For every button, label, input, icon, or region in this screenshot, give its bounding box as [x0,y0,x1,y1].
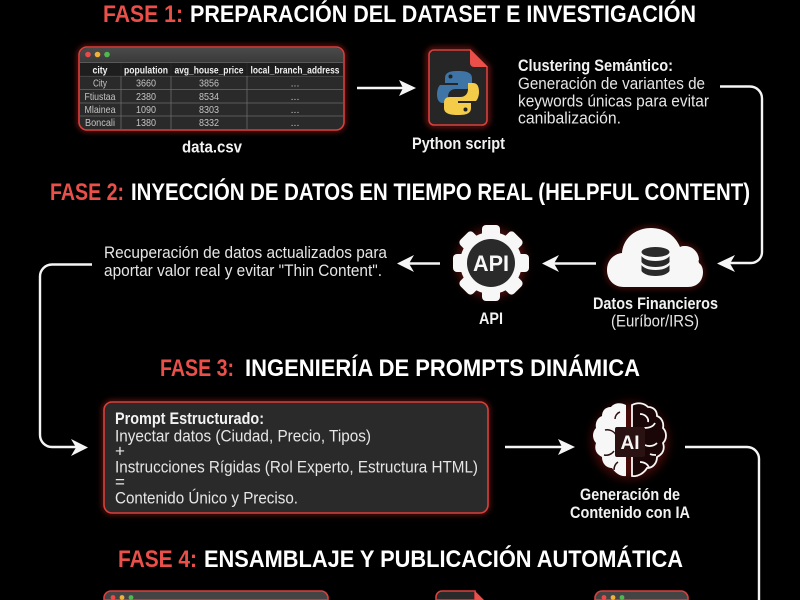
text block: clustering semántico: Generación de variantes de [518,74,705,93]
label: datos financieros [593,294,718,330]
title: fase 2: FASE 2: [50,179,124,206]
label: generación de contenido [570,485,690,522]
text block: clustering semántico [518,56,709,128]
panel: data.csv table window: ... [291,78,299,90]
text block: recuperación de datos: aportar valor real y evitar "Thin Content". [104,261,382,280]
arrow: prompt to ai [505,439,575,455]
panel: data.csv table window [79,47,344,130]
panel: data.csv table window: ... [291,104,299,116]
panel: data.csv table window: 8332 [199,117,219,129]
panel: bottom window left [104,591,328,600]
icon: python script file [428,49,488,126]
panel: data.csv table window: avg_house_price [174,64,244,76]
panel: data.csv table window: 1380 [136,117,156,129]
label: datos financieros: (Euríbor/IRS) [611,312,699,330]
panel: prompt estructurado: = [115,472,125,492]
icon: cloud with database [607,228,703,287]
panel: data.csv table window: 1090 [136,104,156,116]
arrow: datos to api [542,255,596,272]
panel: data.csv table window: Boncali [85,117,115,129]
label: data.csv: data.csv [182,138,242,156]
panel: prompt estructurado: Instrucciones Rígidas (Rol Experto, Estructura HTML) [115,458,478,476]
panel: prompt estructurado: Contenido Único y Preciso. [115,488,298,508]
panel: data.csv table window: 3660 [136,78,156,90]
arrow: api to text [397,255,440,272]
arrow: ai to fase 4 [685,447,759,600]
panel: data.csv table window: Ftiustaa [84,91,116,103]
label: datos financieros: Datos Financieros [593,294,718,313]
title: fase 1: PREPARACIÓN DEL DATASET E INVESTIGACIÓN [190,0,696,28]
title: fase 1: FASE 1: [103,1,183,28]
panel: prompt estructurado: + [115,442,125,460]
panel: data.csv table window: local_branch_address [250,64,340,76]
arrow: clustering to datos financieros [717,86,762,272]
panel: data.csv table window: 8303 [199,104,219,116]
label: api: API [479,309,503,328]
panel: prompt estructurado [104,402,488,513]
title: fase 4: ENSAMBLAJE Y PUBLICACIÓN AUTOMÁTICA [204,545,683,573]
panel: data.csv table window: population [124,64,168,76]
arrow: table to python [357,80,416,96]
label: generación de contenido: Generación de [580,485,680,504]
text block: clustering semántico: Clustering Semántico: [518,56,673,75]
panel: data.csv table window: ... [291,117,299,129]
text block: recuperación de datos: Recuperación de datos actualizados para [104,243,387,262]
label: generación de contenido: Contenido con IA [570,503,690,522]
panel: data.csv table window: 2380 [136,91,156,103]
panel: data.csv table window: city [92,64,108,76]
title: fase 3: FASE 3: [160,355,234,382]
icon: bottom file [436,591,484,600]
title: fase 3: INGENIERÍA DE PROMPTS DINÁMICA [245,354,640,382]
arrow: text to prompt box [40,264,92,456]
panel: data.csv table window: 3856 [199,78,219,90]
icon: ai brain: AI [620,433,640,454]
text block: clustering semántico: canibalización. [518,108,621,128]
icon: api gear [453,225,529,301]
icon: ai brain [592,403,668,479]
panel: data.csv table window: ... [291,91,299,103]
panel: data.csv table window: Mlainea [84,104,116,116]
text block: recuperación de datos [104,243,387,280]
panel: prompt estructurado: Prompt Estructurado: [115,409,264,428]
panel: data.csv table window: 8534 [199,91,219,103]
panel: bottom window right [595,591,688,600]
text block: clustering semántico: keywords únicas para evitar [518,92,709,110]
panel: data.csv table window: City [93,78,108,90]
title: fase 4: FASE 4: [118,546,197,573]
label: python script: Python script [412,134,505,153]
panel: prompt estructurado: Inyectar datos (Ciudad, Precio, Tipos) [115,426,371,446]
icon: api gear: API [473,251,509,276]
